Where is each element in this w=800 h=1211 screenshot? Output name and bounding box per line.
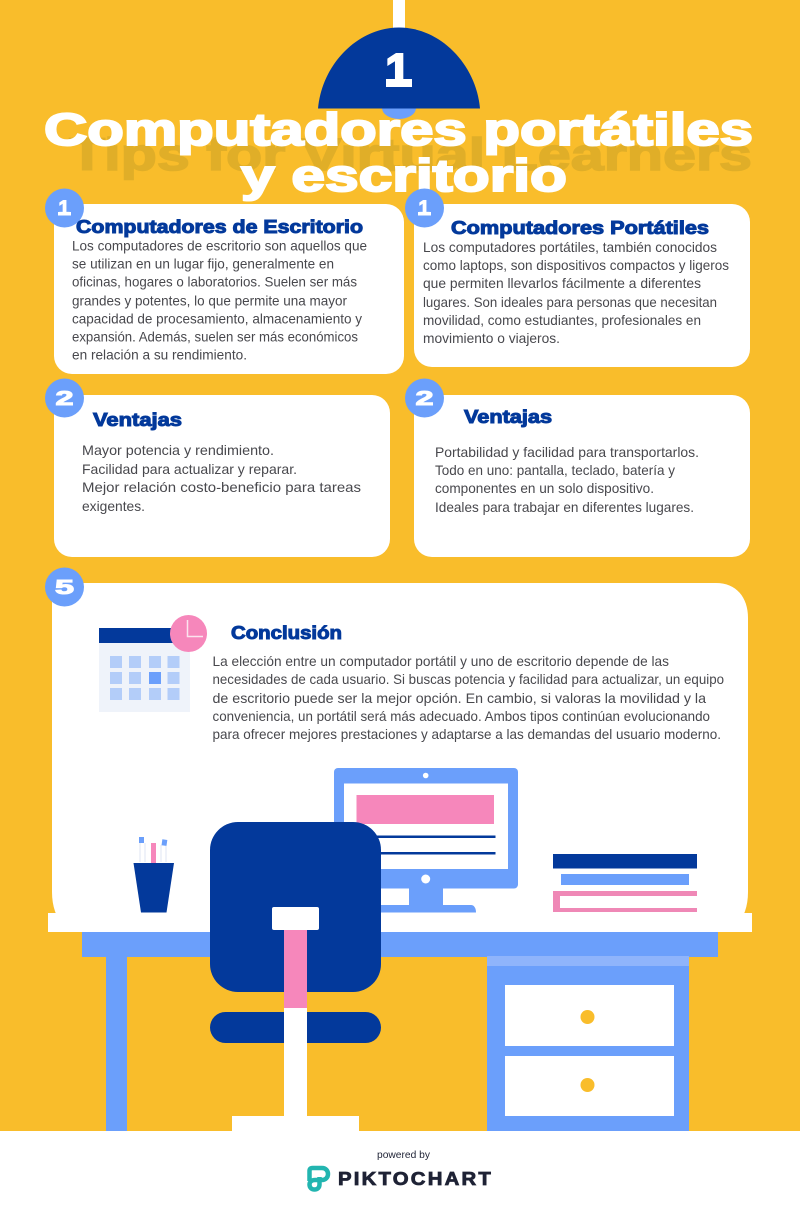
text: descripción escritorio: capacidad de procesamiento, almacenamiento y [72, 310, 362, 326]
badge 5: 5 [55, 577, 74, 599]
badge 2 right [405, 378, 444, 418]
text: conclusión: para ofrecer mejores prestaciones y adaptarse a las demandas del usuario moderno. [212, 726, 721, 742]
text: conclusión: necesidades de cada usuario. Si buscas potencia y facilidad para actualizar, un equipo [212, 671, 724, 687]
text: descripción portátiles: movilidad, como estudiantes, profesionales en [423, 312, 701, 328]
badge 2 right: 2 [416, 388, 434, 410]
text: descripción escritorio [72, 238, 367, 362]
text: descripción escritorio: Los computadores de escritorio son aquellos que [72, 238, 367, 254]
text: conclusión: La elección entre un computador portátil y uno de escritorio depende de las [212, 653, 669, 669]
panel: computadores de escritorio [45, 188, 404, 374]
badge 1 left: 1 [58, 198, 70, 220]
text: ventajas escritorio: Mayor potencia y rendimiento. [82, 442, 274, 458]
icon: ceiling lamp: 1 [385, 44, 411, 96]
text: descripción escritorio: grandes y potentes, lo que permite una mayor [72, 292, 347, 308]
icon: pen cup [134, 837, 174, 912]
desk drawers [487, 956, 689, 1131]
footer [0, 1131, 800, 1211]
icon: stack of books [553, 854, 697, 912]
footer credit: powered by [377, 1149, 431, 1161]
badge 1 left [45, 188, 84, 228]
icon: piktochart logo [310, 1168, 328, 1190]
text: ventajas escritorio: Mejor relación costo-beneficio para tareas [82, 479, 361, 495]
badge 2 left [45, 378, 84, 418]
text: descripción portátiles: como laptops, son dispositivos compactos y ligeros [423, 257, 729, 273]
heading: conclusión: Conclusión [231, 623, 342, 643]
text: ventajas portátiles: Portabilidad y facilidad para transportarlos. [435, 444, 699, 460]
title: Computadores portátiles [44, 104, 753, 155]
badge 1 right [405, 188, 444, 228]
heading: ventajas escritorio: Ventajas [93, 410, 182, 430]
panel: ventajas portátiles [405, 378, 750, 557]
text: descripción escritorio: expansión. Además, suelen ser más económicos [72, 328, 358, 344]
text: conclusión: de escritorio puede ser la mejor opción. En cambio, si valoras la movilidad y la [212, 690, 706, 706]
text: descripción portátiles [423, 239, 729, 346]
text: conclusión [212, 653, 724, 742]
text: descripción portátiles: lugares. Son ideales para personas que necesitan [423, 294, 717, 310]
text: descripción escritorio: oficinas, hogares o laboratorios. Suelen ser más [72, 274, 357, 290]
desk [48, 913, 752, 1131]
icon: ceiling lamp [318, 0, 480, 119]
icon: calendar with clock [99, 615, 207, 712]
text: conclusión: conveniencia, un portátil será más adecuado. Ambos tipos continúan evolucionando [212, 708, 710, 724]
panel: conclusión [45, 568, 748, 926]
background title shadow: Tips for Virtual Learners [69, 129, 752, 180]
text: ventajas portátiles: Todo en uno: pantalla, teclado, batería y [435, 462, 675, 478]
logo wordmark: PIKTOCHART [338, 1168, 493, 1189]
text: ventajas portátiles: componentes en un solo dispositivo. [435, 480, 654, 496]
badge 1 right: 1 [418, 198, 430, 220]
text: ventajas portátiles [435, 444, 699, 515]
text: descripción escritorio: en relación a su rendimiento. [72, 346, 247, 362]
text: ventajas portátiles: Ideales para trabajar en diferentes lugares. [435, 499, 694, 515]
text: descripción portátiles: Los computadores portátiles, también conocidos [423, 239, 717, 255]
title: y escritorio [241, 150, 567, 201]
office chair [210, 822, 381, 1131]
title [44, 104, 753, 201]
heading: ventajas portátiles: Ventajas [464, 407, 552, 427]
text: ventajas escritorio [82, 442, 361, 514]
panel: ventajas escritorio [45, 378, 390, 557]
text: descripción portátiles: que permiten llevarlos fácilmente a diferentes [423, 275, 701, 291]
badge 2 left: 2 [56, 388, 74, 410]
heading: computadores portátiles: Computadores Portátiles [451, 218, 709, 238]
heading: computadores de escritorio: Computadores de Escritorio [76, 217, 363, 237]
text: ventajas escritorio: exigentes. [82, 498, 145, 514]
text: ventajas escritorio: Facilidad para actualizar y reparar. [82, 461, 297, 477]
text: descripción escritorio: se utilizan en un lugar fijo, generalmente en [72, 256, 334, 272]
badge 5 [45, 568, 84, 606]
panel: computadores portátiles [405, 188, 750, 367]
icon: desktop monitor [334, 768, 518, 912]
text: descripción portátiles: movimiento o viajeros. [423, 330, 560, 346]
